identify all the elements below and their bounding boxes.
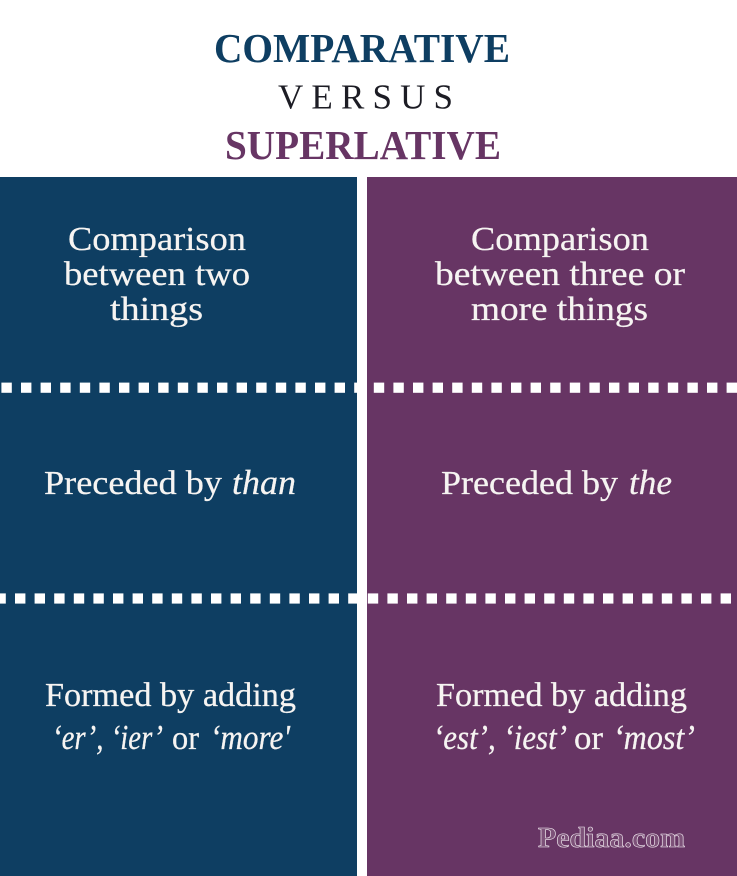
text: comparative definition: Comparison [68,221,246,258]
text: superlative formation [433,677,695,757]
text: comparative definition: between two [64,256,250,293]
text: superlative formation: ‘est’, ‘iest’ [433,718,567,757]
text: superlative formation: Formed by adding [436,677,687,714]
text: comparative formation [45,677,296,757]
text: comparative definition: things [110,291,203,328]
panel: superlative column [367,177,737,876]
text: superlative definition: between three or [435,256,686,293]
heading: superlative: SUPERLATIVE [225,122,501,168]
text: comparative formation: ‘er’, ‘ier’ [52,718,163,757]
panel: comparative column [0,177,357,876]
divider: upper dotted row [1,383,737,393]
text: superlative definition: Comparison [471,221,649,258]
text: superlative formation: or [574,720,604,757]
text: superlative preceded by the: the [629,463,672,502]
divider: lower dotted row [0,593,731,604]
text: superlative definition [435,221,686,328]
text: comparative definition [64,221,250,328]
text: comparative preceded by than [44,463,296,502]
text: comparative formation: or [172,720,200,757]
heading: comparative: COMPARATIVE [214,25,510,71]
text: superlative preceded by the [441,463,672,502]
text: comparative formation: Formed by adding [45,677,296,714]
title [214,25,510,168]
text: comparative preceded by than: than [232,463,296,502]
text: superlative definition: more things [471,291,648,328]
text: comparative preceded by than: Preceded by [44,465,222,502]
logo: Pediaa.com: Pediaa.com [538,823,685,854]
text: superlative preceded by the: Preceded by [441,465,618,502]
text: superlative formation: ‘most’ [613,718,695,757]
text: comparative formation: ‘more' [210,718,290,757]
heading: versus: VERSUS [278,78,453,116]
